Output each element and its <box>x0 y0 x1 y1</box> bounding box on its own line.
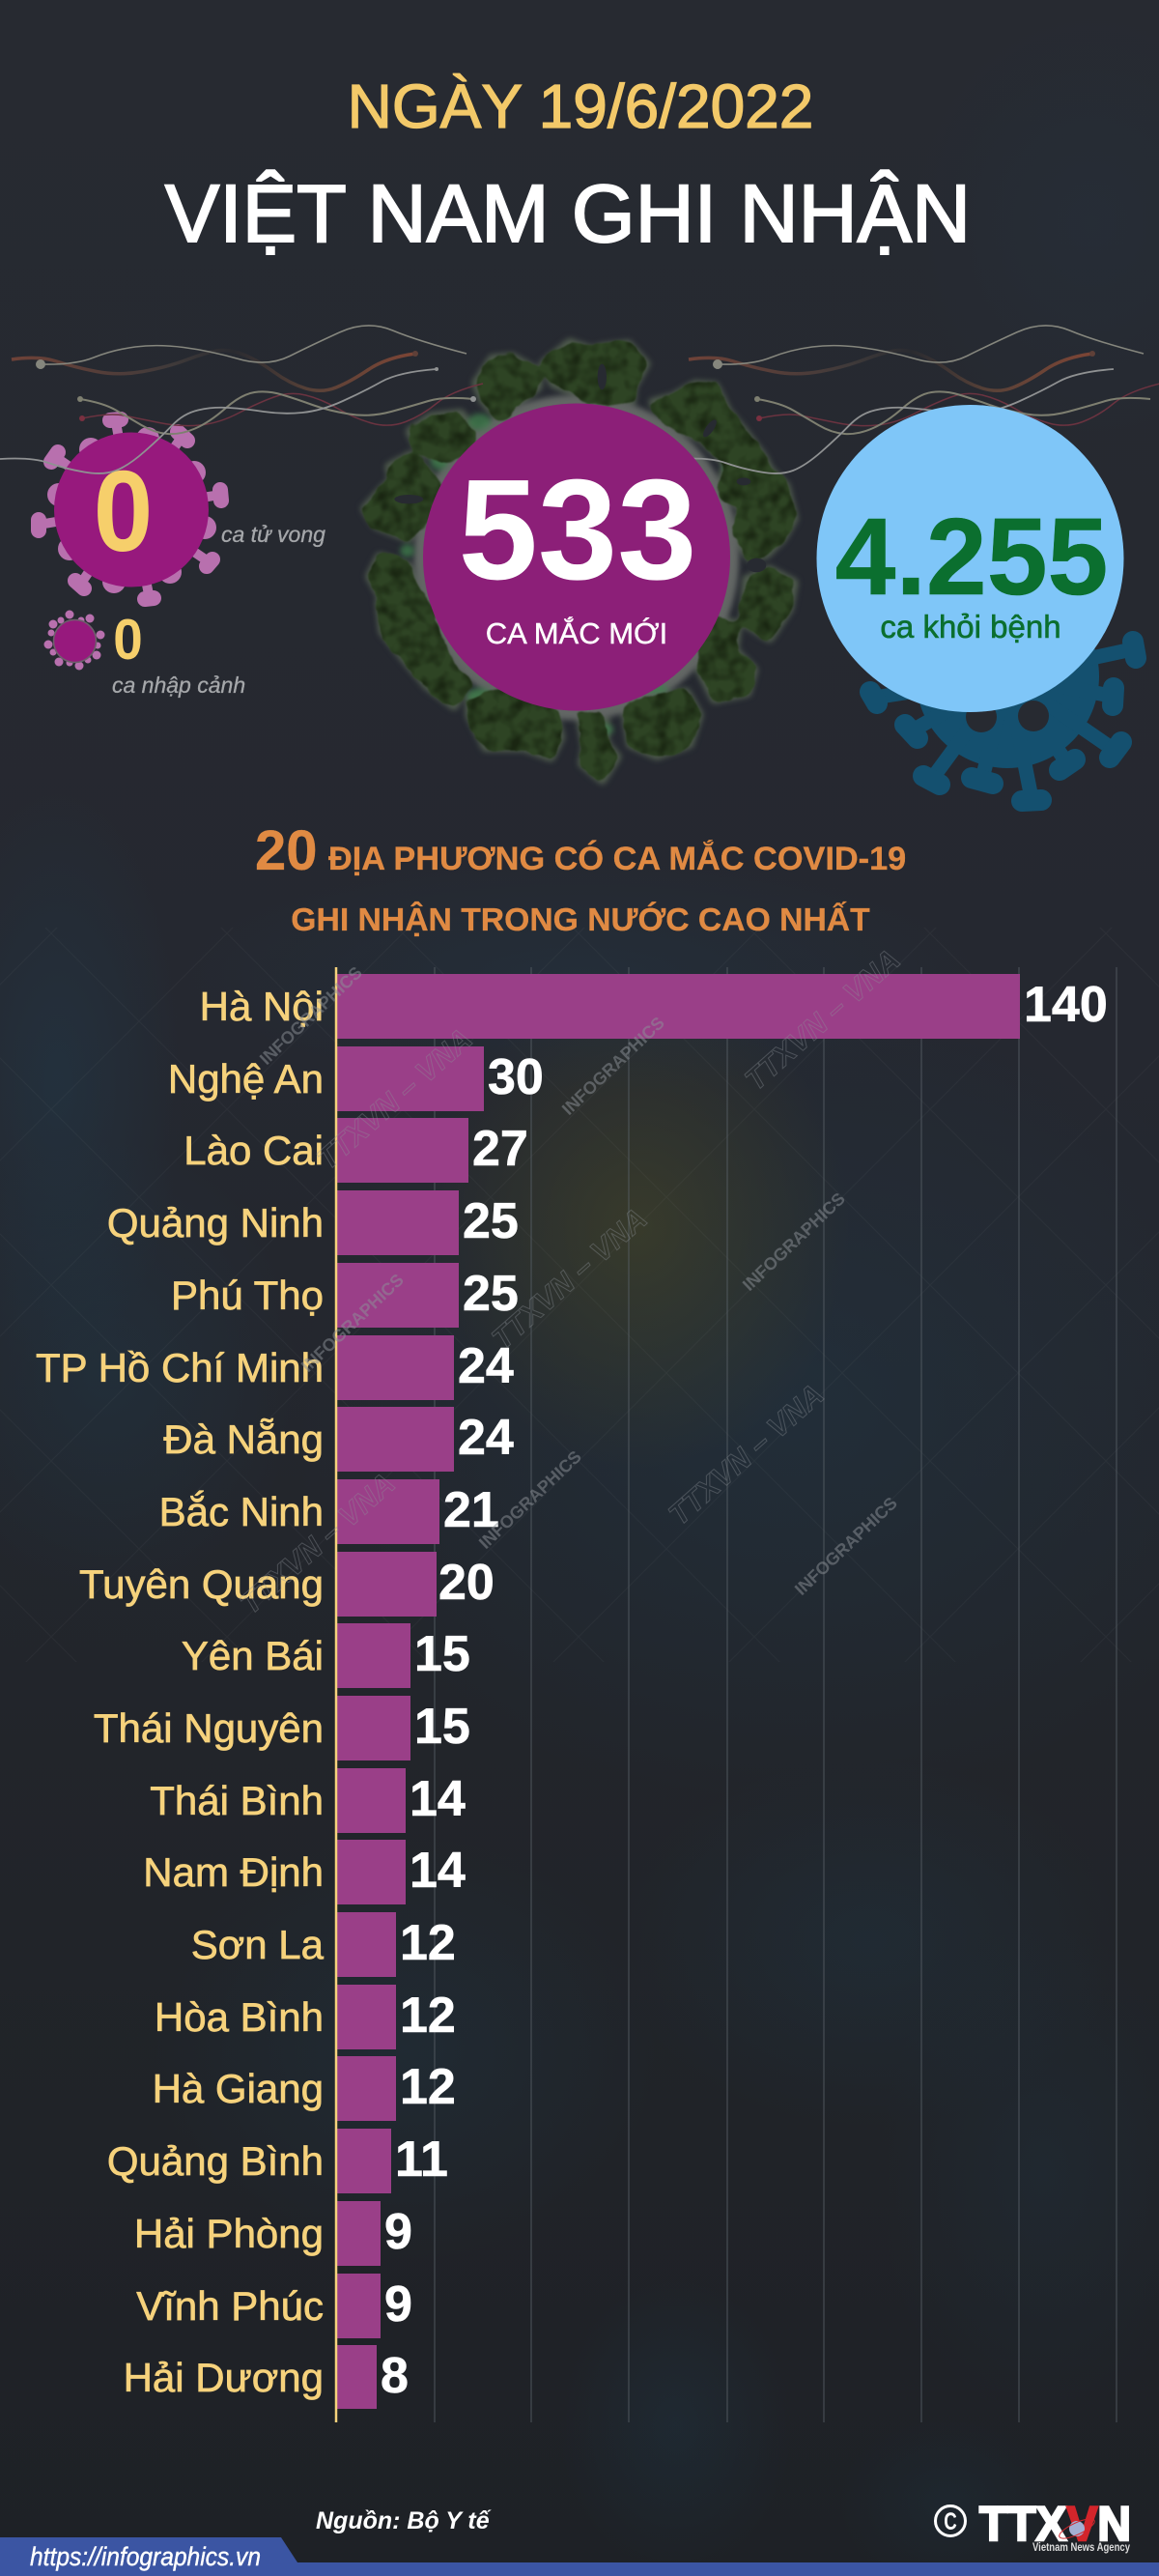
row: Hà Nội: 140 <box>1024 977 1108 1033</box>
icon: imported virus <box>44 611 104 671</box>
row: Quảng Ninh: Quảng Ninh <box>107 1200 324 1245</box>
row: Vĩnh Phúc <box>136 2274 412 2338</box>
row: Hòa Bình: 12 <box>400 1988 456 2044</box>
row: Quảng Ninh <box>107 1190 519 1255</box>
logo: TTXVN: C <box>944 2507 957 2535</box>
row: Đà Nẵng: 24 <box>458 1410 514 1466</box>
chart heading: GHI NHẬN TRONG NƯỚC CAO NHẤT <box>291 902 870 938</box>
row: Tuyên Quang: Tuyên Quang <box>79 1561 324 1607</box>
row: Thái Nguyên <box>94 1696 470 1760</box>
row: Phú Thọ: Phú Thọ <box>171 1273 324 1318</box>
deaths label: ca tử vong <box>221 522 325 547</box>
watermarks: INFOGRAPHICS <box>791 1493 901 1599</box>
row: Thái Bình: 14 <box>410 1771 466 1827</box>
row: Thái Nguyên: Thái Nguyên <box>94 1705 324 1751</box>
row: Thái Nguyên: 15 <box>414 1699 470 1755</box>
chart heading: ĐỊA PHƯƠNG CÓ CA MẮC COVID-19 <box>328 839 906 877</box>
row: Lào Cai: Lào Cai <box>184 1128 324 1173</box>
row: Hà Giang <box>153 2056 456 2121</box>
row: Thái Bình: Thái Bình <box>150 1778 324 1823</box>
row: Hà Giang: Hà Giang <box>153 2066 324 2111</box>
row: Quảng Bình <box>107 2129 448 2193</box>
row: Đà Nẵng <box>163 1407 514 1472</box>
row: Nam Định: 14 <box>410 1843 466 1899</box>
row: Hòa Bình <box>155 1985 456 2049</box>
row: Thái Bình <box>150 1768 466 1833</box>
panel: new cases <box>423 404 730 711</box>
row: Bắc Ninh: Bắc Ninh <box>159 1489 324 1534</box>
row: TP Hồ Chí Minh: TP Hồ Chí Minh <box>36 1345 324 1390</box>
icon: blue coronavirus <box>870 585 1136 801</box>
imported label: ca nhập cảnh <box>112 673 245 698</box>
row: TP Hồ Chí Minh: 24 <box>458 1338 514 1394</box>
row: Tuyên Quang: 20 <box>438 1555 495 1611</box>
row: Nam Định: Nam Định <box>143 1849 324 1895</box>
icon: decorative waves left <box>0 326 483 473</box>
row: Bắc Ninh <box>159 1479 499 1544</box>
icon: deaths virus <box>39 419 221 599</box>
watermarks: TTXVN – VNA <box>233 1466 402 1620</box>
logo: TTXVN: TTXVN <box>979 2497 1131 2551</box>
row: Hải Phòng <box>134 2201 412 2266</box>
row: Quảng Bình: 11 <box>395 2132 448 2188</box>
recovered label: ca khỏi bệnh <box>880 609 1061 644</box>
row: TP Hồ Chí Minh <box>36 1335 514 1400</box>
watermarks: TTXVN – VNA <box>485 1201 654 1356</box>
row: Sơn La <box>191 1912 456 1977</box>
row: Hải Dương: 8 <box>381 2348 409 2404</box>
footer band <box>0 2537 1159 2576</box>
row: Nghệ An: Nghệ An <box>168 1056 324 1102</box>
row: Nghệ An: 30 <box>488 1049 544 1105</box>
watermarks <box>233 942 907 1620</box>
bar chart <box>36 974 1108 2409</box>
imported number: 0 <box>113 608 143 672</box>
new cases number: 533 <box>459 450 696 610</box>
row: Nghệ An <box>168 1046 544 1111</box>
chart heading: 20 <box>255 819 318 882</box>
row: Đà Nẵng: Đà Nẵng <box>163 1417 324 1462</box>
icon: decorative waves right <box>677 326 1159 473</box>
row: Phú Thọ: 25 <box>463 1266 519 1322</box>
row: Hà Giang: 12 <box>400 2059 456 2115</box>
row: Bắc Ninh: 21 <box>443 1482 499 1538</box>
row: Hòa Bình: Hòa Bình <box>155 1994 324 2040</box>
chart axis <box>335 967 337 2422</box>
title: date: NGÀY 19/6/2022 <box>348 72 813 141</box>
watermarks: INFOGRAPHICS <box>739 1188 849 1295</box>
row: Lào Cai: 27 <box>472 1121 528 1177</box>
row: Quảng Ninh: 25 <box>463 1193 519 1249</box>
deaths number: 0 <box>94 447 153 576</box>
watermarks: TTXVN – VNA <box>738 942 907 1097</box>
row: Nam Định <box>143 1840 466 1904</box>
chart heading <box>255 819 906 938</box>
watermarks: INFOGRAPHICS <box>256 962 366 1069</box>
row: Sơn La: Sơn La <box>191 1922 325 1967</box>
icon: large green coronavirus <box>365 343 794 780</box>
footer url: https://infographics.vn <box>30 2542 261 2571</box>
row: Yên Bái <box>182 1623 470 1688</box>
watermarks: INFOGRAPHICS <box>297 1270 408 1376</box>
source: Nguồn: Bộ Y tế <box>316 2507 492 2534</box>
row: Hải Dương: Hải Dương <box>124 2355 324 2400</box>
watermarks: TTXVN – VNA <box>662 1377 831 1531</box>
row: Vĩnh Phúc: Vĩnh Phúc <box>136 2283 324 2329</box>
row: Quảng Bình: Quảng Bình <box>107 2138 324 2184</box>
watermarks: TTXVN – VNA <box>310 1021 479 1176</box>
row: Yên Bái: 15 <box>414 1626 470 1682</box>
row: Vĩnh Phúc: 9 <box>384 2276 412 2333</box>
panel: recovered <box>817 405 1124 712</box>
new cases label: CA MẮC MỚI <box>486 615 667 650</box>
row: Hà Nội: Hà Nội <box>200 984 324 1029</box>
chart gridlines <box>435 967 1117 2422</box>
row: Hải Phòng: Hải Phòng <box>134 2211 324 2256</box>
row: Phú Thọ <box>171 1263 519 1328</box>
row: Sơn La: 12 <box>400 1915 456 1971</box>
row: Yên Bái: Yên Bái <box>182 1633 324 1678</box>
title: main: VIỆT NAM GHI NHẬN <box>165 168 971 259</box>
watermarks: INFOGRAPHICS <box>475 1446 585 1553</box>
row: Lào Cai <box>184 1118 528 1183</box>
recovered number: 4.255 <box>835 496 1108 617</box>
row: Hải Phòng: 9 <box>384 2204 412 2260</box>
logo: TTXVN: Vietnam News Agency <box>1032 2540 1130 2554</box>
row: Hải Dương <box>124 2345 409 2409</box>
row: Hà Nội <box>200 974 1108 1039</box>
row: Tuyên Quang <box>79 1552 495 1617</box>
watermarks: INFOGRAPHICS <box>558 1013 668 1119</box>
